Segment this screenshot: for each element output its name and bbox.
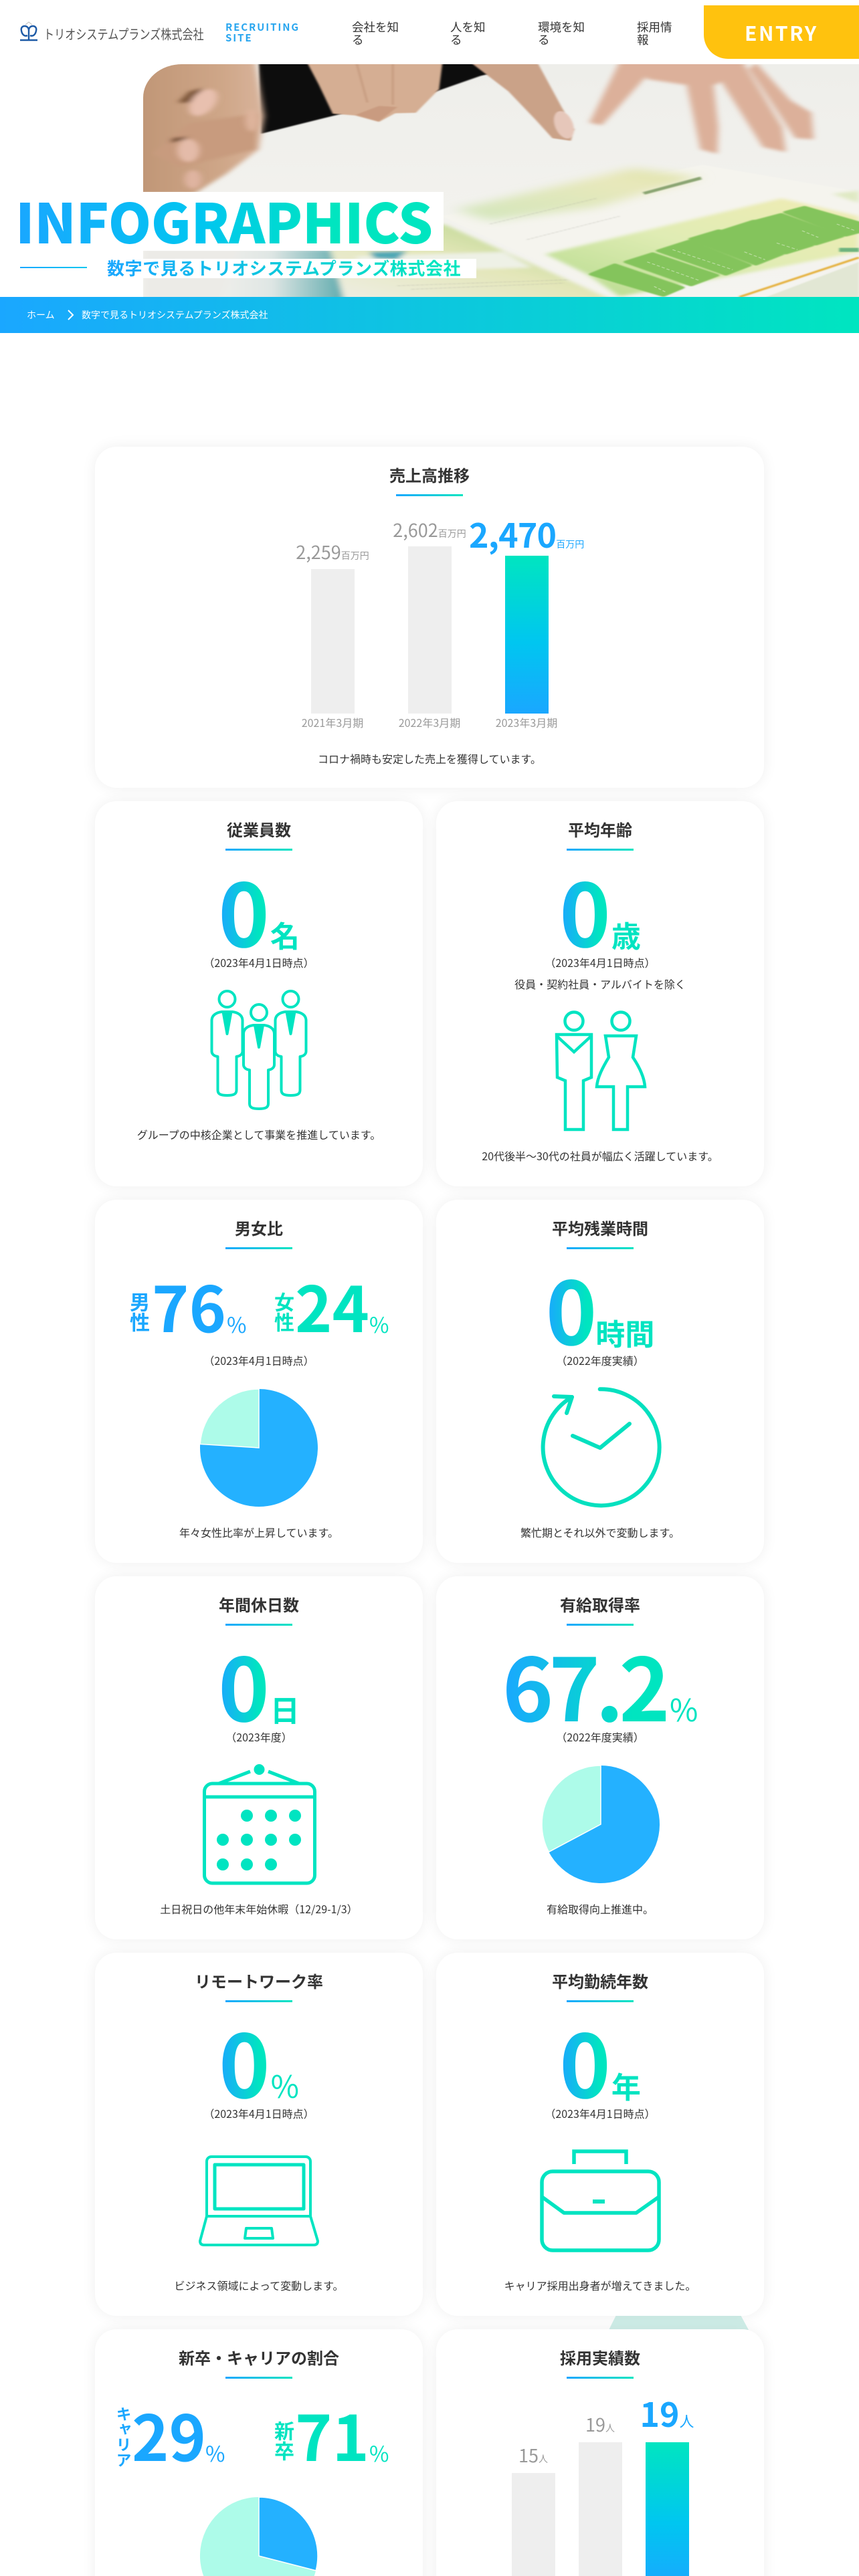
bar 2021 bbox=[311, 569, 355, 714]
value 2022: 2,602百万円 bbox=[393, 516, 466, 542]
breadcrumb home: ホーム bbox=[27, 308, 55, 322]
panel: paid leave rate bbox=[436, 1576, 764, 1939]
recruiting site label: SITE bbox=[225, 31, 253, 45]
heading: リモートワーク率 bbox=[195, 1969, 323, 1992]
icon: chevron bbox=[68, 310, 74, 320]
panel: sales trend bbox=[95, 447, 764, 788]
middle hand bbox=[306, 60, 443, 122]
pie chart bbox=[200, 2497, 317, 2576]
header bbox=[20, 5, 859, 59]
subtitle left mask bbox=[143, 259, 476, 278]
nav: people: る bbox=[450, 31, 462, 48]
value 3: 19人 bbox=[640, 2389, 694, 2437]
heading: 平均勤続年数 bbox=[552, 1969, 648, 1992]
green buttons bbox=[591, 207, 859, 296]
value 2021: 2,259百万円 bbox=[296, 538, 369, 564]
year label 2021: 2021年3月期 bbox=[302, 714, 363, 730]
caption: ビジネス領域によって変動します。 bbox=[174, 2277, 344, 2293]
subtitle rule bbox=[20, 267, 87, 268]
big number: 0日 bbox=[218, 1621, 300, 1747]
value 2: 19人 bbox=[585, 2411, 615, 2437]
nav: recruitment: 採用情 bbox=[637, 19, 672, 35]
year label 2023: 2023年3月期 bbox=[496, 714, 557, 730]
breadcrumb bar bbox=[0, 297, 859, 333]
big number: 67.2% bbox=[502, 1621, 698, 1747]
heading rule bbox=[567, 1624, 634, 1626]
right hand bbox=[589, 60, 814, 154]
panel: hires bbox=[436, 2329, 764, 2576]
new grad number: 71 bbox=[295, 2389, 369, 2480]
panel: annual holidays bbox=[95, 1576, 423, 1939]
hero subtitle bbox=[20, 255, 476, 280]
big number: 0% bbox=[219, 1998, 299, 2123]
date note: （2023年4月1日時点） bbox=[203, 1352, 314, 1368]
icon: briefcase bbox=[540, 2149, 661, 2252]
heading: 男女比 bbox=[235, 1216, 283, 1239]
left hand bbox=[134, 60, 264, 194]
big number: 0時間 bbox=[546, 1245, 654, 1370]
panel: employees bbox=[95, 801, 423, 1186]
date note: （2022年度実績） bbox=[556, 1729, 644, 1745]
caption: 20代後半～30代の社員が幅広く活躍しています。 bbox=[482, 1148, 719, 1164]
heading rule bbox=[225, 2377, 292, 2379]
date note: （2023年4月1日時点） bbox=[203, 954, 314, 970]
male percent: % bbox=[227, 1309, 246, 1339]
date note: （2023年4月1日時点） bbox=[545, 2105, 656, 2121]
caption: グループの中核企業として事業を推進しています。 bbox=[137, 1126, 381, 1142]
big number: 0名 bbox=[218, 847, 300, 972]
heading rule bbox=[567, 2000, 634, 2002]
icon: clock bbox=[541, 1387, 662, 1507]
heading: 採用実績数 bbox=[560, 2345, 640, 2369]
heading rule bbox=[225, 849, 292, 851]
subtitle text: 数字で見るトリオシステムプランズ株式会社 bbox=[107, 255, 461, 280]
heading rule bbox=[225, 1624, 292, 1626]
hero photo bbox=[143, 64, 859, 297]
decorative teal shape bbox=[609, 2316, 749, 2330]
male number: 76 bbox=[152, 1260, 226, 1351]
female percent: % bbox=[369, 1309, 389, 1339]
nav: recruitment: 報 bbox=[637, 31, 649, 48]
bar 2 bbox=[579, 2442, 622, 2576]
logo text: トリオシステムプランズ株式会社 bbox=[43, 23, 204, 43]
bar 1 bbox=[512, 2473, 555, 2576]
nav: company: る bbox=[352, 31, 364, 48]
panel: gender ratio bbox=[95, 1200, 423, 1563]
nav: people bbox=[450, 19, 486, 48]
nav: company bbox=[352, 19, 399, 48]
caption: 土日祝日の他年末年始休暇（12/29-1/3） bbox=[160, 1901, 358, 1917]
date note: （2023年度） bbox=[225, 1729, 292, 1745]
nav: environment: 環境を知 bbox=[538, 19, 585, 35]
icon: man and woman bbox=[555, 1010, 646, 1132]
icon: laptop bbox=[199, 2155, 319, 2246]
heading rule bbox=[567, 2377, 634, 2379]
bar 2023 bbox=[505, 556, 549, 714]
heading: 新卒・キャリアの割合 bbox=[179, 2345, 339, 2369]
heading: 平均年齢 bbox=[568, 817, 632, 841]
heading: 有給取得率 bbox=[560, 1592, 640, 1616]
year label 2022: 2022年3月期 bbox=[399, 714, 460, 730]
main sheet bbox=[442, 165, 859, 298]
heading: 平均残業時間 bbox=[552, 1216, 648, 1239]
faint text lines bbox=[397, 199, 619, 290]
date note: （2023年4月1日時点） bbox=[203, 2105, 314, 2121]
nav: environment: る bbox=[538, 31, 550, 48]
nav: recruitment bbox=[637, 19, 672, 48]
bar 2022 bbox=[408, 546, 452, 714]
breadcrumb current: 数字で見るトリオシステムプランズ株式会社 bbox=[82, 308, 268, 322]
heading rule bbox=[225, 2000, 292, 2002]
icon: three people bbox=[210, 990, 308, 1110]
entry button bbox=[704, 5, 859, 59]
value 1: 15人 bbox=[518, 2442, 548, 2468]
new grad label: 新卒 bbox=[270, 2421, 299, 2461]
icon: logo mark bbox=[20, 21, 37, 41]
new grad percent: % bbox=[369, 2438, 389, 2468]
big number: 0年 bbox=[559, 1998, 641, 2123]
left papers bbox=[143, 224, 615, 301]
heading rule bbox=[396, 494, 463, 496]
nav: company: 会社を知 bbox=[352, 19, 399, 35]
heading: 売上高推移 bbox=[389, 463, 470, 486]
heading rule bbox=[567, 1247, 634, 1249]
male label: 男性 bbox=[125, 1292, 155, 1332]
heading rule bbox=[567, 849, 634, 851]
heading rule bbox=[225, 1247, 292, 1249]
female label: 女性 bbox=[270, 1292, 299, 1332]
caption: 繁忙期とそれ以外で変動します。 bbox=[520, 1524, 680, 1540]
date note: （2023年4月1日時点） bbox=[545, 954, 656, 970]
entry button: ENTRY bbox=[745, 17, 818, 47]
nav: people: 人を知 bbox=[450, 19, 486, 35]
pointing finger bbox=[468, 60, 577, 141]
logo bbox=[20, 21, 204, 43]
bar chart bbox=[296, 510, 584, 730]
pie chart bbox=[542, 1765, 660, 1883]
pie chart bbox=[200, 1389, 318, 1507]
sheet edge bbox=[740, 257, 859, 297]
value 2023: 2,470百万円 bbox=[469, 510, 584, 558]
exclusion note: 役員・契約社員・アルバイトを除く bbox=[514, 976, 686, 992]
caption: キャリア採用出身者が増えてきました。 bbox=[504, 2277, 696, 2293]
panel: remote work rate bbox=[95, 1953, 423, 2316]
caption: コロナ禍時も安定した売上を獲得しています。 bbox=[318, 750, 541, 766]
panel: new grad and career ratio bbox=[95, 2329, 423, 2576]
caption: 年々女性比率が上昇しています。 bbox=[179, 1524, 339, 1540]
career label: キャリア bbox=[112, 2406, 135, 2468]
panel: average age bbox=[436, 801, 764, 1186]
bar 3 bbox=[646, 2442, 689, 2576]
dark background wedge bbox=[259, 60, 550, 134]
career number: 29 bbox=[132, 2389, 206, 2480]
icon: calendar bbox=[203, 1764, 316, 1885]
infographics text: INFOGRAPHICS bbox=[15, 180, 433, 259]
panel: average tenure bbox=[436, 1953, 764, 2316]
recruiting site label: RECRUITING bbox=[225, 20, 300, 34]
heading: 年間休日数 bbox=[219, 1592, 299, 1616]
green bands bbox=[455, 169, 700, 221]
heading: 従業員数 bbox=[227, 817, 291, 841]
date note: （2022年度実績） bbox=[556, 1352, 644, 1368]
career percent: % bbox=[205, 2438, 225, 2468]
recruiting site label bbox=[225, 20, 300, 45]
female number: 24 bbox=[295, 1260, 369, 1351]
nav: environment bbox=[538, 19, 585, 48]
hero title bbox=[0, 192, 444, 251]
caption: 有給取得向上推進中。 bbox=[547, 1901, 654, 1917]
panel: overtime bbox=[436, 1200, 764, 1563]
big number: 0歳 bbox=[559, 847, 641, 972]
